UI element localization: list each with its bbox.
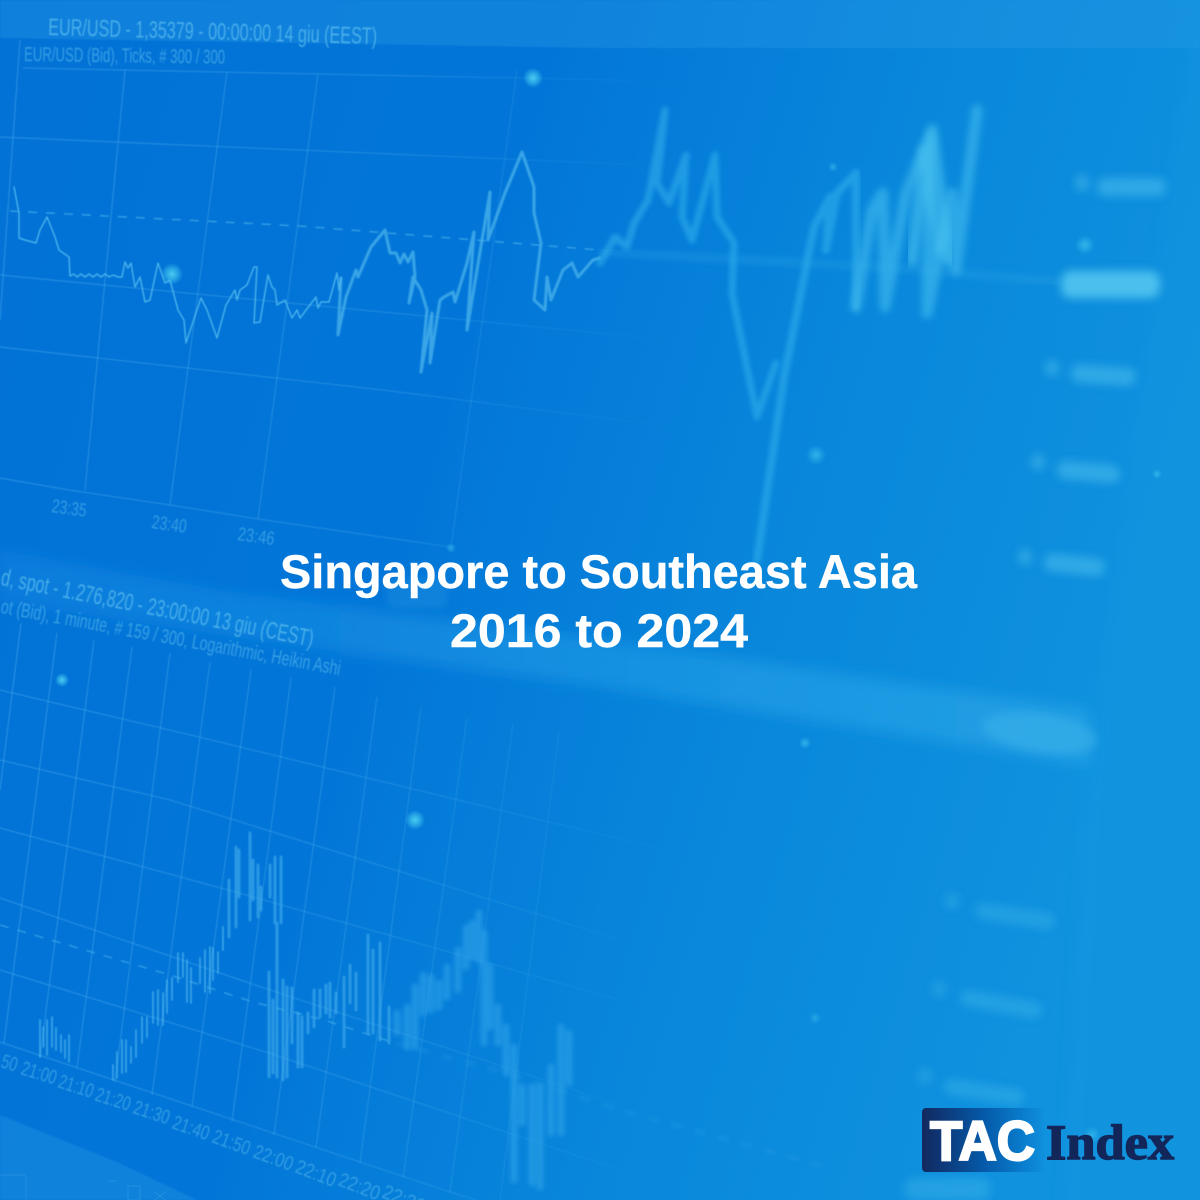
lower chart time axis labels	[0, 1051, 428, 1200]
logo badge	[922, 1108, 1044, 1172]
upper chart time axis labels: 23:46	[236, 524, 276, 550]
lower chart header text: d, spot - 1.276,820 - 23:00:00 13 giu (CEST)	[0, 564, 316, 653]
upper chart time axis labels	[50, 496, 276, 550]
lower chart time axis labels: 21:10	[55, 1071, 96, 1103]
lower chart time axis labels: 22:00	[250, 1141, 296, 1176]
lower chart time axis labels: 21:30	[130, 1097, 172, 1129]
upper chart time axis labels: 23:35	[50, 496, 88, 522]
window controls	[0, 1175, 165, 1200]
right side panel	[1060, 30, 1200, 1200]
lower chart time axis labels: 21:20	[92, 1084, 133, 1116]
upper chart header text: EUR/USD - 1,35379 - 00:00:00 14 giu (EEST)	[48, 14, 377, 50]
bottom left toolbar band	[0, 1115, 197, 1200]
faint blurred axis label behind title	[387, 578, 447, 608]
lower chart time axis labels: 21:00	[19, 1058, 59, 1089]
lower chart header text: ot (Bid), 1 minute, # 159 / 300, Logarithmic, Heikin Ashi	[0, 596, 342, 680]
logo text TAC: TAC	[930, 1109, 1035, 1172]
lower chart time axis labels: 21:50	[209, 1126, 253, 1160]
right price axis labels	[905, 175, 1166, 1200]
logo text Index: Index	[1046, 1114, 1174, 1170]
upper chart price line	[14, 110, 977, 560]
upper chart header text	[24, 14, 377, 69]
top toolbar band	[0, 0, 1200, 48]
middle toolbar band	[0, 550, 1100, 765]
title: Singapore to Southeast Asia	[280, 545, 918, 598]
upper chart header text: EUR/USD (Bid), Ticks, # 300 / 300	[24, 44, 225, 69]
lower chart grid	[0, 623, 700, 1200]
upper chart time axis labels: 23:40	[150, 512, 188, 538]
upper chart grid	[0, 40, 700, 547]
title	[280, 545, 918, 657]
lower chart time axis labels: 22:10	[292, 1156, 339, 1192]
logo: TAC Index	[922, 1108, 1174, 1172]
upper chart reference dashed line	[10, 211, 1060, 282]
lower chart time axis labels: 21:40	[169, 1112, 212, 1145]
title: 2016 to 2024	[450, 604, 748, 657]
lower chart candlesticks	[40, 833, 569, 1187]
band bright end	[980, 706, 1100, 760]
lower chart reference dashed line	[0, 925, 830, 1168]
